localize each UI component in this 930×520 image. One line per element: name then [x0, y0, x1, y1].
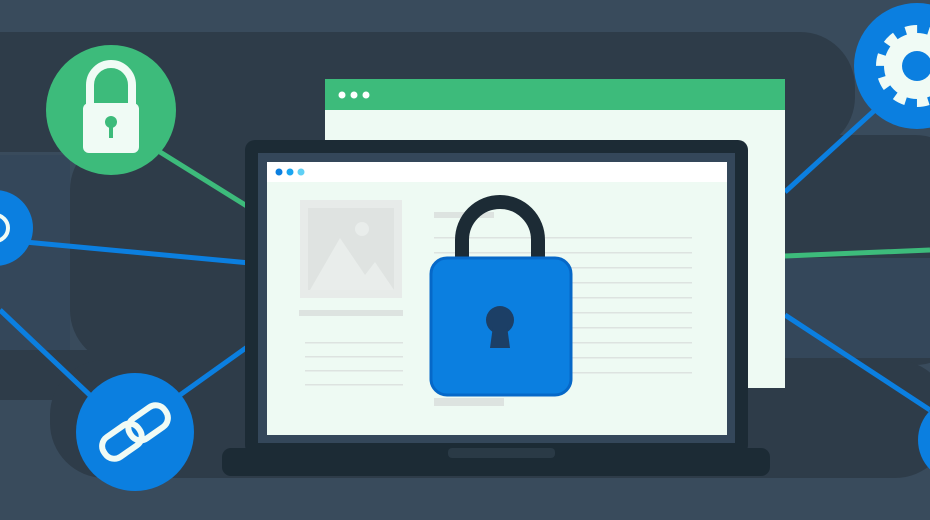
connector lines	[0, 110, 930, 410]
back browser window	[325, 79, 785, 388]
icon: gear circle	[854, 3, 930, 129]
image placeholder	[300, 200, 402, 298]
text lines	[299, 212, 692, 406]
icon: bottom right circle	[918, 398, 930, 482]
padlock	[431, 202, 571, 395]
icon: globe circle	[0, 190, 33, 266]
icon: green lock circle	[46, 45, 176, 175]
laptop	[222, 140, 770, 476]
icon: link circle	[76, 373, 194, 491]
